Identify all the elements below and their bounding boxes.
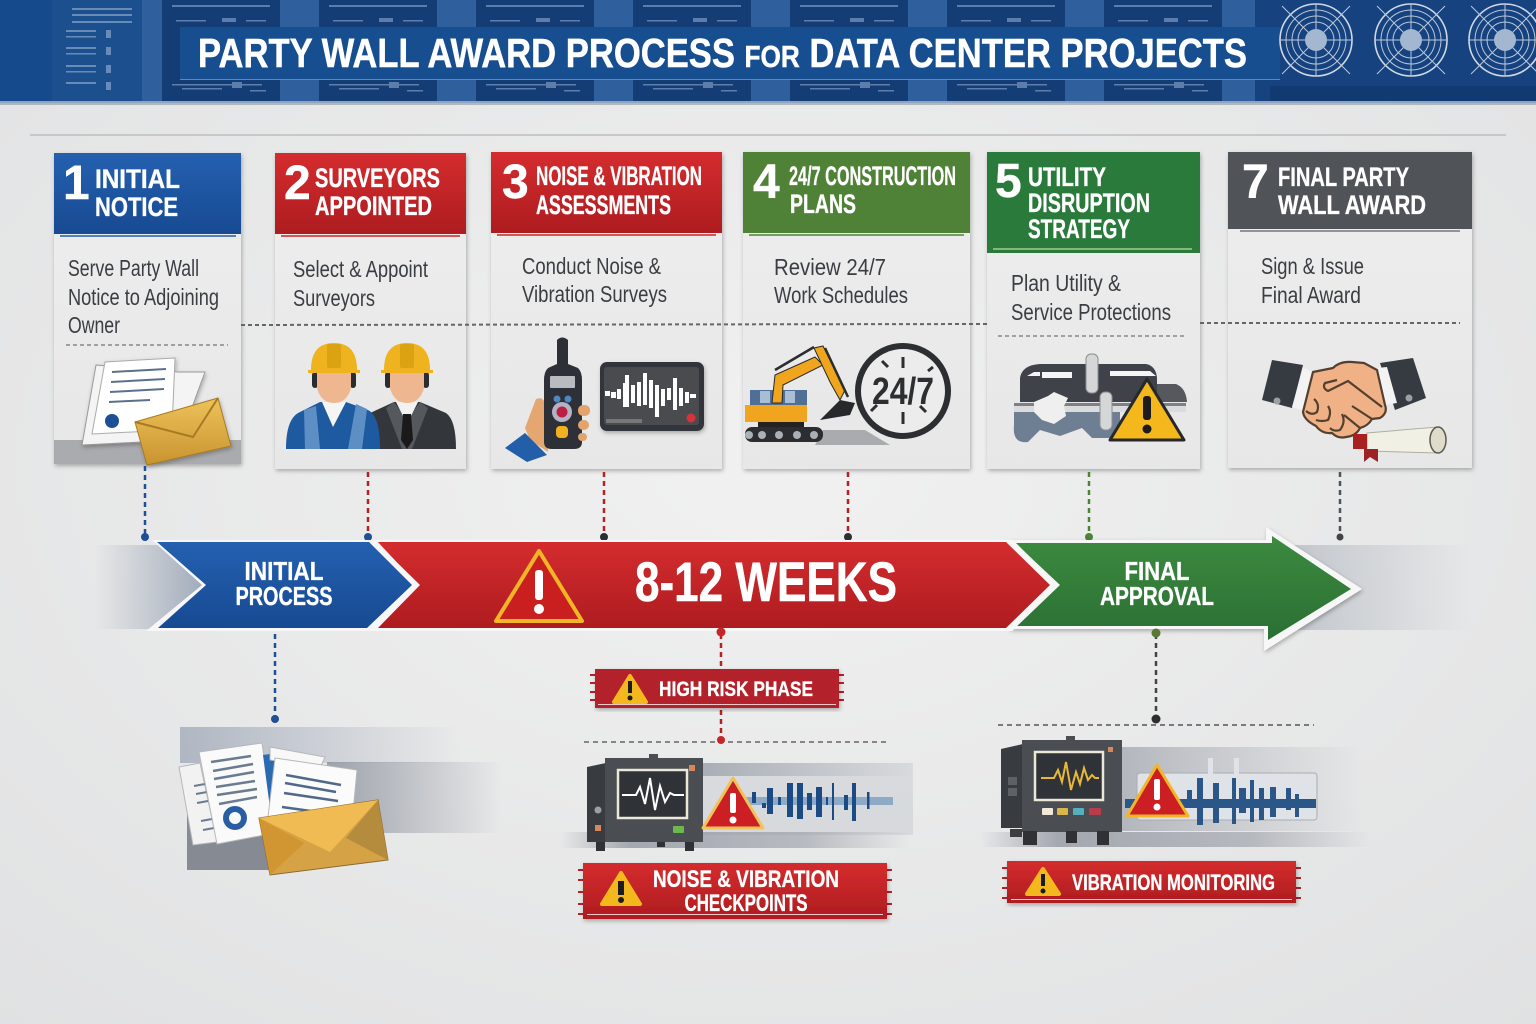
header banner <box>0 0 1536 105</box>
panel: step 5 utility disruption strategy <box>987 152 1200 469</box>
panel: step 4 24/7 construction plans <box>743 152 970 469</box>
panel: step 5 utility disruption strategy: Plan Utility & <box>1011 270 1121 296</box>
callout: high risk phase: HIGH RISK PHASE <box>659 678 813 701</box>
panel: step 5 utility disruption strategy: 5 <box>995 155 1022 208</box>
panel: step 4 24/7 construction plans: 4 <box>753 156 780 209</box>
title: PARTY WALL AWARD PROCESS FOR DATA CENTER PROJECTS <box>198 30 1247 76</box>
callout: noise and vibration checkpoints <box>578 863 892 919</box>
panel: step 5 utility disruption strategy: UTILITY <box>1028 162 1106 192</box>
panel: step 2 surveyors appointed <box>275 153 466 469</box>
callout: vibration monitoring <box>1002 861 1301 903</box>
panel: step 1 initial notice: NOTICE <box>95 192 178 222</box>
panel: step 3 noise and vibration assessments: Vibration Surveys <box>522 281 667 307</box>
callout: noise and vibration checkpoints: NOISE & VIBRATION <box>653 866 839 893</box>
panel: step 7 final party wall award: Sign & Issue <box>1261 253 1364 279</box>
icon: noise monitor with waveform <box>560 754 913 851</box>
panel: step 2 surveyors appointed: 2 <box>284 157 311 210</box>
panel: step 5 utility disruption strategy: DISRUPTION <box>1028 188 1150 218</box>
arrow segment: 8-12 weeks: 8-12 WEEKS <box>635 550 897 613</box>
panel: step 2 surveyors appointed: Surveyors <box>293 285 375 311</box>
panel: step 5 utility disruption strategy: STRATEGY <box>1028 214 1130 244</box>
icon: excavator and 24/7 clock: 24/7 <box>872 371 934 413</box>
arrow segment: initial process <box>146 540 418 631</box>
icon: server fans <box>1280 4 1536 76</box>
panel: step 3 noise and vibration assessments: Conduct Noise & <box>522 253 661 279</box>
icon: sound level meter in hand <box>505 338 590 462</box>
panel: step 4 24/7 construction plans: 24/7 CONSTRUCTION <box>789 161 956 191</box>
panel: step 7 final party wall award: 7 <box>1242 156 1269 209</box>
arrow segment: final approval <box>1008 527 1362 651</box>
panel: step 4 24/7 construction plans: Review 24/7 <box>774 254 886 280</box>
panel: step 1 initial notice: Owner <box>68 312 120 338</box>
panel: step 3 noise and vibration assessments: 3 <box>502 156 529 209</box>
arrow segment: initial process: PROCESS <box>236 581 332 611</box>
panel: step 2 surveyors appointed: Select & Appoint <box>293 256 428 282</box>
arrow segment: final approval: FINAL <box>1124 556 1190 586</box>
panel: step 1 initial notice <box>54 153 241 465</box>
connectors: cards to timeline <box>145 466 1340 536</box>
panel: step 7 final party wall award <box>1228 152 1472 468</box>
panel: step 1 initial notice: Serve Party Wall <box>68 255 199 281</box>
connectors: timeline to lower items <box>275 634 1314 742</box>
arrow segment: final approval: APPROVAL <box>1100 581 1214 611</box>
panel: step 3 noise and vibration assessments: NOISE & VIBRATION <box>536 161 702 191</box>
callout: vibration monitoring: VIBRATION MONITORING <box>1072 870 1275 895</box>
panel: step 7 final party wall award: FINAL PARTY <box>1278 162 1409 192</box>
icon: handshake and scroll <box>1262 358 1446 462</box>
panel: step 7 final party wall award: Final Award <box>1261 282 1361 308</box>
panel: step 3 noise and vibration assessments: ASSESSMENTS <box>536 190 671 220</box>
callout: noise and vibration checkpoints: CHECKPOINTS <box>684 890 808 917</box>
icon: warning triangle <box>496 551 582 621</box>
icon: vibration monitor with waveform <box>980 736 1370 847</box>
timeline arrow <box>95 527 1470 651</box>
panel: step 2 surveyors appointed: APPOINTED <box>315 191 432 221</box>
icon: two surveyors in hard hats <box>286 343 456 449</box>
icon: utility pipes with warning <box>1014 354 1187 442</box>
icon: documents and envelope <box>179 727 502 875</box>
card row dotted lines <box>241 323 1460 325</box>
panel: step 5 utility disruption strategy: Service Protections <box>1011 299 1171 325</box>
panel: step 1 initial notice: Notice to Adjoining <box>68 284 219 310</box>
panel: step 1 initial notice: INITIAL <box>95 164 180 194</box>
icon: excavator and 24/7 clock <box>745 346 948 445</box>
panel: step 7 final party wall award: WALL AWARD <box>1278 190 1426 220</box>
panel: step 1 initial notice: 1 <box>63 157 90 210</box>
arrow segment: initial process: INITIAL <box>244 556 324 586</box>
panel: step 4 24/7 construction plans: Work Schedules <box>774 282 908 308</box>
arrow segment: 8-12 weeks <box>372 540 1060 631</box>
callout: high risk phase <box>590 669 844 708</box>
panel: step 3 noise and vibration assessments <box>491 152 722 469</box>
icon: notice documents and envelope <box>82 358 231 465</box>
panel: step 4 24/7 construction plans: PLANS <box>790 189 856 219</box>
panel: step 2 surveyors appointed: SURVEYORS <box>315 163 440 193</box>
icon: waveform monitor <box>600 362 704 431</box>
